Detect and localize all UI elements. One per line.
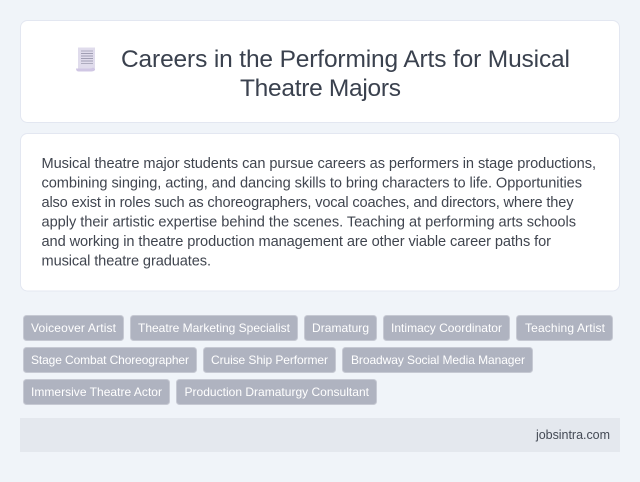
tag: Teaching Artist: Teaching Artist: [525, 321, 606, 335]
text block: description paragraph: also exist in roles such as choreographers, vocal coaches, and directors, where they: [42, 195, 574, 211]
tag: Stage Combat Choreographer: Stage Combat Choreographer: [31, 353, 189, 367]
tag: Voiceover Artist: [24, 316, 124, 340]
footer source text: jobsintra.com: [535, 428, 610, 442]
tag: Broadway Social Media Manager: [342, 348, 532, 372]
panel: description: [20, 134, 620, 291]
tag: Intimacy Coordinator: Intimacy Coordinator: [391, 321, 502, 335]
text block: description paragraph: combining singing, acting, and dancing skills to bring characters to life. Opportunities: [42, 176, 582, 192]
tag: Cruise Ship Performer: Cruise Ship Performer: [211, 353, 328, 367]
tag: Dramaturg: Dramaturg: [312, 321, 369, 335]
tag: Production Dramaturgy Consultant: Production Dramaturgy Consultant: [184, 385, 370, 399]
tag: Theatre Marketing Specialist: Theatre Marketing Specialist: [138, 321, 291, 335]
title: Theatre Majors: [240, 75, 401, 102]
tag: Stage Combat Choreographer: [24, 348, 196, 372]
icon: paper scroll: [76, 48, 95, 72]
tag: Production Dramaturgy Consultant: [176, 380, 376, 404]
text block: description paragraph: and working in theatre production management are other viable career paths for: [42, 234, 551, 250]
tag: Voiceover Artist: Voiceover Artist: [31, 321, 117, 335]
panel: title card: [20, 20, 620, 122]
tag: Theatre Marketing Specialist: [130, 316, 298, 340]
tag: Broadway Social Media Manager: Broadway Social Media Manager: [351, 353, 525, 367]
text block: description paragraph: apply their artistic expertise behind the scenes. Teaching at performing arts schools: [42, 214, 576, 230]
text block: description paragraph: musical theatre graduates.: [42, 254, 211, 270]
tag: Immersive Theatre Actor: [24, 380, 170, 404]
title: Careers in the Performing Arts for Musical: [121, 46, 570, 73]
tag: Teaching Artist: [516, 316, 612, 340]
footer bar: [20, 418, 620, 452]
tag: Cruise Ship Performer: [204, 348, 336, 372]
title: [121, 46, 570, 102]
tag: Intimacy Coordinator: [384, 316, 510, 340]
text block: description paragraph: [42, 156, 596, 270]
tag: Dramaturg: [304, 316, 376, 340]
text block: description paragraph: Musical theatre major students can pursue careers as performers in stage productions,: [42, 156, 596, 172]
tag: Immersive Theatre Actor: Immersive Theatre Actor: [31, 385, 162, 399]
